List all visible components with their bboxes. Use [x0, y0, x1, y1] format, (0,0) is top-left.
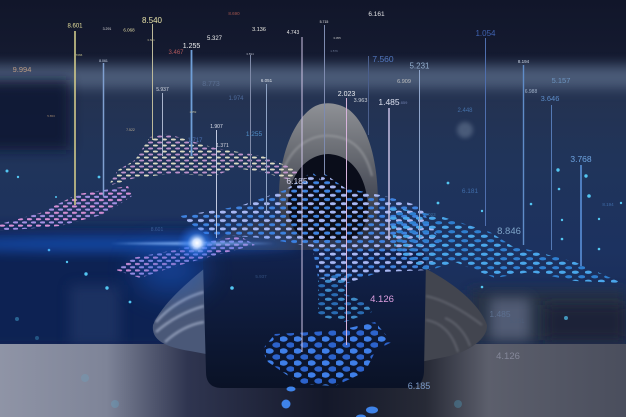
map: eastern blue mass	[388, 206, 622, 283]
data value labels: 5.653	[47, 114, 55, 118]
map: west band	[116, 236, 255, 278]
hood fold highlights	[284, 136, 372, 176]
data value labels: 4.126	[496, 351, 520, 362]
face opening	[288, 154, 368, 240]
map: lower islands	[318, 272, 372, 322]
data value labels: 6.988	[525, 89, 537, 95]
data value labels: 6.909	[397, 79, 411, 85]
shoulders	[210, 216, 424, 268]
data value labels: 1.576	[330, 49, 338, 53]
table	[0, 344, 626, 417]
data value labels: 1.717	[187, 138, 203, 144]
data value labels: 8.194	[602, 202, 614, 207]
data value labels: 2.023	[424, 212, 436, 217]
data value labels: 1.255	[246, 131, 263, 138]
data value labels: 8.773	[202, 81, 220, 88]
data value labels: 5.327	[207, 36, 223, 42]
dotted world map	[0, 134, 622, 417]
left arm	[153, 268, 206, 354]
data value labels: 2.023	[338, 91, 355, 98]
data value labels: 2.448	[457, 108, 473, 114]
hood	[279, 103, 378, 240]
data value labels: 5.937	[255, 274, 267, 279]
data value labels: 859	[401, 100, 408, 105]
data value labels: 1.974	[228, 96, 244, 102]
data value labels: 3.681	[147, 38, 155, 42]
data value labels: 8.690	[228, 11, 240, 16]
data value labels: 6.185	[286, 176, 308, 186]
data value labels: 5.231	[509, 319, 525, 325]
data value labels: 3.963	[354, 98, 367, 104]
data value labels: 6.185	[408, 381, 430, 391]
data value labels: 3.768	[570, 154, 592, 164]
data value labels: 5.937	[156, 87, 169, 93]
map: southern mass	[262, 322, 392, 386]
right arm	[420, 268, 487, 362]
map: upper landmass	[108, 134, 300, 186]
data value labels: 4.743	[287, 30, 299, 36]
map: small dots under laptop	[282, 386, 378, 417]
data value labels: 8.601	[151, 227, 163, 233]
data value labels: 5.715	[320, 20, 328, 24]
data value labels: 9.994	[13, 65, 31, 74]
data value labels: 5.231	[409, 62, 430, 70]
hacker figure	[153, 103, 487, 362]
data value labels: 2059	[190, 110, 197, 114]
data value labels: 6.181	[462, 188, 479, 195]
data value labels: 8.846	[497, 226, 521, 237]
vertical data lines	[75, 24, 581, 352]
data value labels: 8.540	[142, 16, 163, 25]
data value labels: 6.068	[123, 28, 135, 32]
data value labels: 6.161	[368, 11, 385, 18]
data value labels: 8.194	[518, 59, 530, 64]
data value labels: 7.522	[126, 128, 135, 132]
data value labels: 1.485	[378, 97, 400, 107]
data value labels: 3.467	[168, 50, 184, 56]
data value labels: 1.371	[216, 143, 229, 149]
data value labels: 5.157	[552, 76, 570, 85]
laptop	[203, 250, 426, 388]
data value labels: 3.594	[246, 52, 254, 56]
data value labels: 6.051	[261, 78, 273, 83]
data value labels: 3.136	[252, 27, 266, 33]
data value labels: 3.055	[333, 36, 341, 40]
data value labels: 7.560	[372, 54, 394, 64]
data value labels: 8.061	[99, 59, 108, 63]
data value labels: 3.646	[541, 94, 559, 103]
map: central mass	[312, 172, 440, 284]
map: left landmass	[0, 186, 132, 231]
data value labels: 3.291	[103, 27, 111, 31]
map: upper middle band	[180, 172, 330, 250]
data value labels: 1.255	[183, 43, 200, 50]
data value labels: 1.907	[210, 124, 223, 130]
data value labels: 1.054	[475, 29, 496, 38]
data value labels: 7066	[76, 53, 83, 57]
data value labels: 8.601	[67, 24, 83, 30]
data value labels: 4.126	[370, 294, 394, 305]
lens flare	[0, 223, 300, 294]
scattered glowing particles	[6, 168, 622, 408]
data value labels: 1.485	[489, 309, 511, 319]
